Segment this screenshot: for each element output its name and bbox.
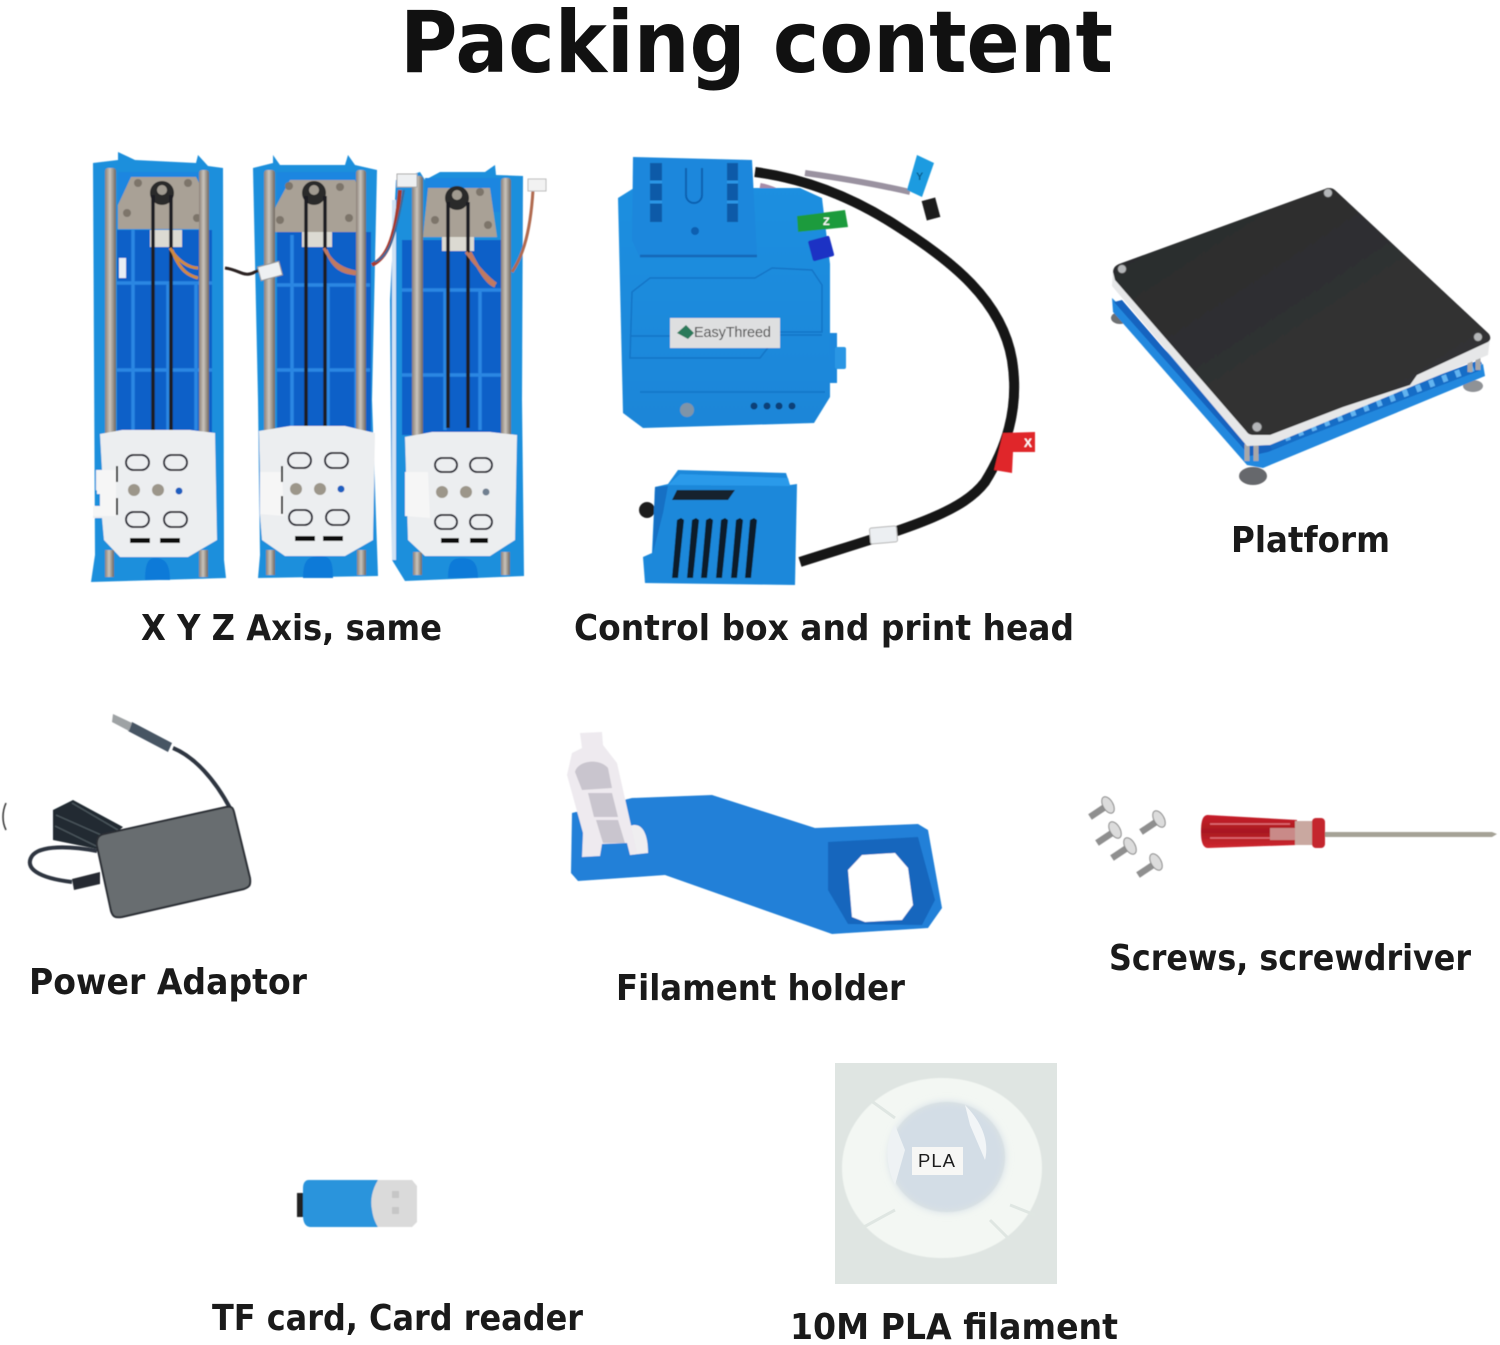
inline connector xyxy=(869,526,898,544)
platform base xyxy=(1112,298,1485,468)
holder base xyxy=(571,795,942,934)
silver plate edge xyxy=(1112,268,1490,446)
label: filament holder: Filament holder xyxy=(616,968,905,1009)
control box body: EasyThreed xyxy=(694,325,771,341)
axis unit 2 xyxy=(253,155,378,578)
PLA label xyxy=(912,1147,963,1175)
DC plug xyxy=(112,714,172,752)
TF card xyxy=(370,1180,417,1227)
label: TF card: TF card, Card reader xyxy=(212,1298,583,1339)
holder arm xyxy=(567,732,648,857)
adaptor body xyxy=(97,807,250,917)
panel: TF card and reader xyxy=(297,1180,417,1227)
filament bag xyxy=(835,1063,1057,1284)
axis unit 1 xyxy=(91,152,226,582)
tag: Z: Z xyxy=(823,216,830,228)
screws xyxy=(1090,795,1168,875)
cable coil xyxy=(53,800,123,849)
tag: X: X xyxy=(1024,436,1032,450)
heated bed plate xyxy=(1113,188,1490,435)
panel: X Y Z axis xyxy=(91,152,546,582)
strain relief xyxy=(72,872,100,890)
panel: platform xyxy=(1111,188,1490,485)
label: platform: Platform xyxy=(1231,520,1390,561)
label: power adaptor: Power Adaptor xyxy=(29,962,307,1003)
reader plug xyxy=(297,1193,305,1217)
panel: screws and screwdriver xyxy=(1090,795,1497,875)
plate screws xyxy=(1118,188,1482,432)
reader body xyxy=(303,1180,378,1227)
PLA label: PLA xyxy=(918,1150,956,1171)
axis wires and connectors xyxy=(225,174,546,281)
axis unit 3 xyxy=(390,165,524,581)
label: control box: Control box and print head xyxy=(574,608,1074,649)
label: X Y Z axis: X Y Z Axis, same xyxy=(141,608,442,649)
spool opening xyxy=(848,853,913,922)
tag: Y xyxy=(907,155,940,220)
wiring harness xyxy=(755,172,1014,562)
screwdriver xyxy=(1201,815,1497,848)
control box body xyxy=(618,157,846,428)
tag: X xyxy=(994,432,1035,473)
print head xyxy=(639,470,797,585)
adaptor cable xyxy=(30,748,230,882)
panel: power adaptor xyxy=(3,714,250,917)
tag: Y: Y xyxy=(916,171,924,183)
panel: PLA filament xyxy=(835,1063,1057,1284)
panel: filament holder xyxy=(567,732,942,934)
filament coil xyxy=(842,1078,1042,1258)
panel: control box and print head xyxy=(618,155,1035,585)
stray edge mark xyxy=(3,803,6,830)
tag: Z xyxy=(797,210,848,261)
mounting recess xyxy=(828,837,935,925)
platform feet xyxy=(1111,312,1483,485)
